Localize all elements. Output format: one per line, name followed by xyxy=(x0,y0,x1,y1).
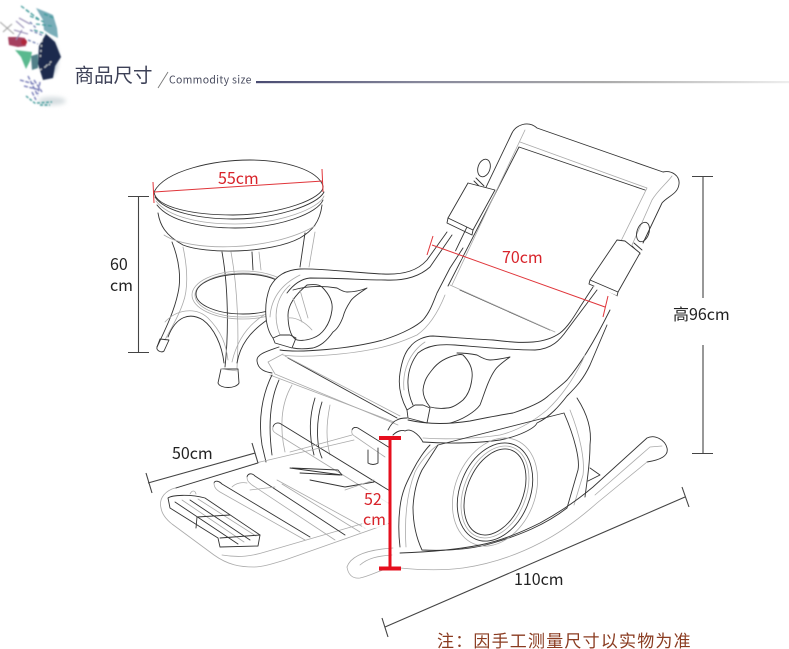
dimension: length 110cm: 110cm xyxy=(514,566,564,590)
dimension: chair width 70cm: 70cm xyxy=(502,244,543,268)
side panel with oval xyxy=(399,398,600,559)
heading: 商品尺寸 Commodity size xyxy=(74,59,789,88)
foot pedal xyxy=(168,495,260,547)
dimension: chair height 96cm xyxy=(673,176,730,454)
dimension: stool height 60cm: 60 xyxy=(110,251,128,275)
icon: particle face xyxy=(0,6,66,105)
dimension: stool height 60cm: cm xyxy=(110,272,133,296)
dimension: length 110cm xyxy=(382,487,689,637)
heading: 商品尺寸 Commodity size: 商品尺寸 xyxy=(74,59,153,88)
left armrest scroll xyxy=(266,232,463,356)
left strap and knob xyxy=(447,158,495,235)
chair back frame xyxy=(437,124,679,332)
dimension: footrest 50cm: 50cm xyxy=(172,440,213,464)
footrest xyxy=(160,423,390,567)
seat rail and frame xyxy=(257,347,400,462)
dimension: chair width 70cm xyxy=(427,236,608,317)
heading: 商品尺寸 Commodity size: Commodity size xyxy=(169,72,252,88)
dimension: stool diameter 55cm xyxy=(153,165,323,203)
right armrest scroll xyxy=(388,285,617,443)
dimension: chair height 96cm: 高96cm xyxy=(673,301,730,325)
dimension: seat height 52cm xyxy=(362,436,401,570)
dimension: footrest 50cm xyxy=(146,440,258,493)
dimension: stool height 60cm xyxy=(110,196,149,352)
rocking chair drawing xyxy=(160,124,679,578)
stool drawing xyxy=(154,160,324,388)
dimension: seat height 52cm: cm xyxy=(363,506,386,530)
dimension: seat height 52cm: 52 xyxy=(364,486,382,510)
rocker rail xyxy=(347,437,667,578)
right strap and knob xyxy=(589,221,652,296)
dimension: stool diameter 55cm: 55cm xyxy=(218,165,259,189)
